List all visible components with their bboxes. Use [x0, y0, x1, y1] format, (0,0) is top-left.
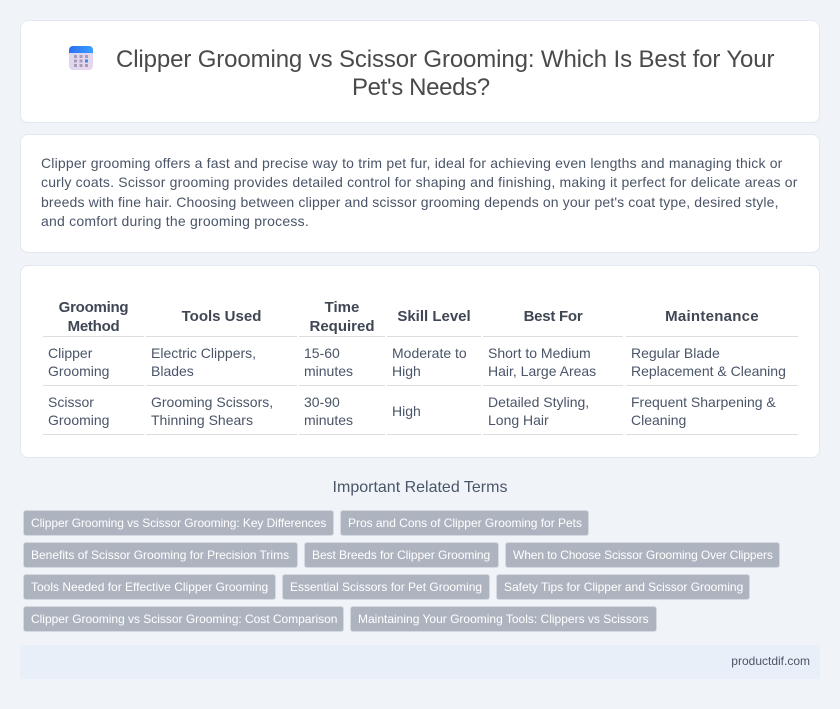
header: Maintenance: Maintenance: [665, 308, 759, 325]
related term tags: [23, 510, 780, 632]
header: Grooming Method: [59, 298, 128, 334]
header: Tools Used: Tools Used: [182, 308, 261, 325]
tag: [282, 574, 490, 600]
intro text: and comfort during the grooming process.: [41, 213, 309, 229]
tag: Tools Needed for Effective Clipper Grooming: [31, 580, 268, 594]
row: Clipper Grooming: Short to Medium: [488, 345, 591, 361]
tag: [304, 542, 499, 568]
row: Scissor Grooming: Frequent Sharpening &: [631, 394, 776, 410]
intro text: [41, 155, 798, 229]
row: Clipper Grooming: Moderate to: [392, 345, 467, 361]
tag: [505, 542, 780, 568]
row: Clipper Grooming: Regular Blade: [631, 345, 720, 361]
tag: [496, 574, 750, 600]
title: Clipper Grooming vs Scissor Grooming: Which Is Best for Your: [116, 46, 774, 73]
row: Clipper Grooming: Electric Clippers,: [151, 345, 256, 361]
header: Time Required: Required: [309, 318, 374, 334]
tag: Best Breeds for Clipper Grooming: [312, 548, 490, 562]
tag: [350, 606, 657, 632]
table card: [20, 265, 820, 458]
header: Skill Level: Skill Level: [397, 308, 471, 325]
row: Scissor Grooming: Long Hair: [488, 412, 549, 428]
tag: [23, 542, 298, 568]
header: Best For: Best For: [524, 308, 582, 325]
tag: Pros and Cons of Clipper Grooming for Pets: [348, 516, 582, 530]
row: Clipper Grooming: Clipper: [48, 345, 92, 361]
row: Clipper Grooming: Blades: [151, 363, 194, 379]
title: Pet's Needs?: [352, 74, 490, 101]
intro text: breeds with fine hair. Choosing between clipper and scissor grooming depends on your pet's coat type, desired style,: [41, 194, 779, 210]
title card: [20, 20, 820, 123]
row: Scissor Grooming: Grooming Scissors,: [151, 394, 273, 410]
heading: Important Related Terms: Important Related Terms: [333, 479, 507, 496]
title: [116, 46, 774, 101]
intro text: Clipper grooming offers a fast and precise way to trim pet fur, ideal for achieving even lengths and managing thick or: [41, 155, 783, 171]
intro text: curly coats. Scissor grooming provides detailed control for shaping and finishing, making it perfect for delicate areas or: [41, 174, 798, 190]
footer source text: productdif.com: [731, 654, 810, 668]
row: Clipper Grooming: minutes: [304, 363, 353, 379]
tag: Benefits of Scissor Grooming for Precision Trims: [31, 548, 289, 562]
row: Scissor Grooming: High: [392, 403, 421, 419]
row: Scissor Grooming: 30-90: [304, 394, 340, 410]
tag: [23, 510, 334, 536]
tag: Maintaining Your Grooming Tools: Clippers vs Scissors: [358, 612, 649, 626]
tag: [23, 606, 344, 632]
tag: [23, 574, 276, 600]
row: Clipper Grooming: Hair, Large Areas: [488, 363, 596, 379]
header: Grooming Method: Method: [68, 318, 119, 334]
header: Time Required: [309, 298, 374, 334]
intro card: [20, 134, 820, 253]
row: Scissor Grooming: Cleaning: [631, 412, 686, 428]
row: Clipper Grooming: Replacement & Cleaning: [631, 363, 786, 379]
tag: Clipper Grooming vs Scissor Grooming: Key Differences: [31, 516, 326, 530]
row: Clipper Grooming: Grooming: [48, 363, 109, 379]
row: Scissor Grooming: minutes: [304, 412, 353, 428]
row: Clipper Grooming: High: [392, 363, 421, 379]
row: Scissor Grooming: [48, 394, 776, 428]
header: Time Required: Time: [325, 298, 359, 316]
row: Scissor Grooming: Scissor: [48, 394, 94, 410]
icon: calendar grid: [69, 46, 93, 70]
tag: When to Choose Scissor Grooming Over Clippers: [513, 548, 773, 562]
row: Clipper Grooming: [48, 345, 786, 379]
row: Scissor Grooming: Grooming: [48, 412, 109, 428]
tag: [340, 510, 589, 536]
row: Clipper Grooming: 15-60: [304, 345, 340, 361]
tag: Essential Scissors for Pet Grooming: [290, 580, 482, 594]
header: Grooming Method: Grooming: [59, 298, 128, 316]
tag: Clipper Grooming vs Scissor Grooming: Cost Comparison: [31, 612, 337, 626]
footer bar: [20, 645, 820, 679]
row: Scissor Grooming: Detailed Styling,: [488, 394, 589, 410]
row: Scissor Grooming: Thinning Shears: [151, 412, 253, 428]
tag: Safety Tips for Clipper and Scissor Grooming: [504, 580, 743, 594]
comparison table: [43, 298, 798, 435]
